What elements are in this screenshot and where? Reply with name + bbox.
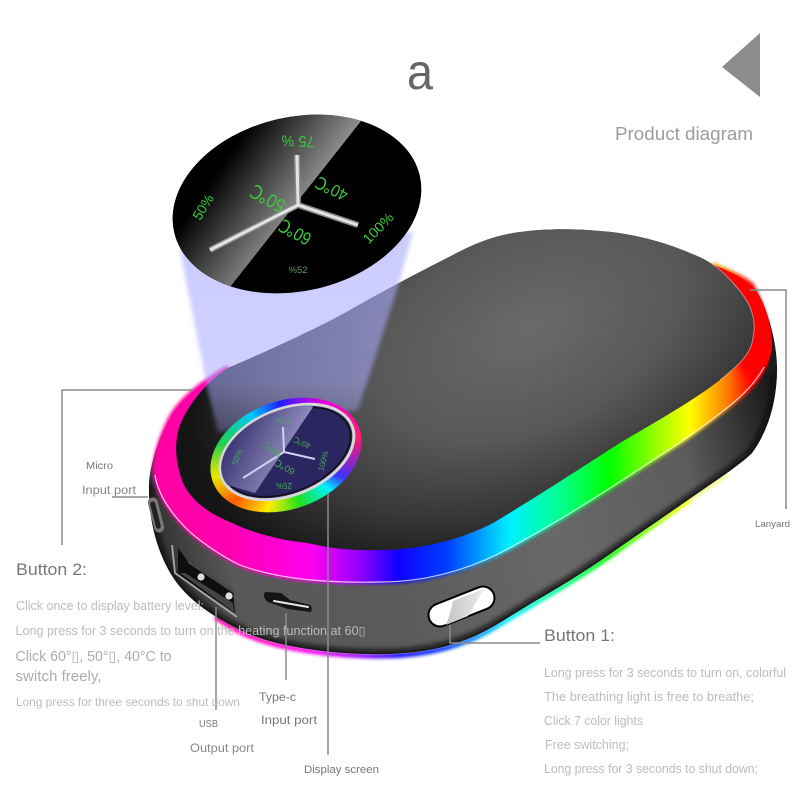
label: micro input port	[82, 461, 137, 497]
display readings: 50℃	[261, 439, 283, 459]
product: hand warmer device	[149, 229, 800, 656]
display bezel	[206, 386, 368, 518]
disc pointer spokes	[210, 155, 358, 250]
label: display screen: Display screen	[304, 764, 379, 776]
disc readings: 50%	[189, 191, 217, 223]
text block: button 1: Click 7 color lights	[544, 713, 643, 728]
enlarged display disc	[172, 114, 422, 294]
text block: button 1: Free switching;	[545, 737, 629, 752]
type-c input port	[264, 592, 312, 612]
leader: micro input port	[112, 496, 148, 498]
display sheen	[221, 405, 313, 493]
disc readings: 60℃	[275, 215, 315, 249]
underside rainbow glow	[215, 500, 690, 656]
text block: button 2	[16, 560, 366, 709]
button 1 control	[440, 589, 484, 625]
text block: button 1: Long press for 3 seconds to turn on, colorful	[544, 665, 786, 680]
label: USB output port	[190, 719, 255, 755]
heading: button 1: Button 1:	[544, 626, 615, 645]
disc sheen	[172, 114, 361, 286]
leader: display screen	[327, 493, 329, 755]
text block: button 2: Click 60°▯, 50°▯, 40°C to	[16, 649, 172, 665]
label: lanyard: Lanyard	[755, 519, 790, 530]
body edge shadow	[149, 373, 777, 654]
ring white highlight	[155, 367, 764, 582]
disc readings: 40℃	[312, 172, 351, 205]
text block: button 1	[544, 626, 786, 776]
text block: button 2: Click once to display battery level:	[16, 599, 204, 613]
rainbow ring glow	[155, 264, 768, 582]
label: USB output port: Output port	[190, 743, 255, 755]
micro USB port	[147, 496, 165, 534]
display readings: 60℃	[273, 456, 297, 477]
disc readings: %52	[288, 265, 308, 276]
red ring end	[712, 264, 772, 378]
label: type-c input port: Type-c	[259, 690, 296, 704]
display readings: 25%	[276, 481, 292, 490]
disc readings: 100%	[359, 209, 397, 247]
leader: lanyard	[750, 290, 786, 509]
display spokes	[243, 427, 315, 478]
section label: product diagram: Product diagram	[615, 123, 753, 144]
label: micro input port: Micro	[86, 461, 113, 472]
top edge highlight	[712, 264, 754, 380]
rainbow light ring	[155, 264, 772, 582]
leader lines	[62, 290, 786, 755]
icon: back arrow	[722, 33, 760, 97]
display colour ring	[200, 390, 372, 520]
leader: type-c input	[285, 613, 287, 680]
label: USB output port: USB	[199, 719, 218, 730]
USB output port	[172, 545, 237, 617]
device body	[149, 229, 777, 654]
leader: button 1	[450, 625, 540, 643]
top surface	[176, 229, 754, 550]
label: micro input port: Input port	[82, 485, 137, 497]
label: type-c input port: Input port	[261, 713, 318, 727]
display readings	[231, 416, 330, 490]
projection light beam	[180, 232, 413, 432]
label: type-c input port	[259, 690, 318, 727]
text block: button 1: Long press for 3 seconds to shut down;	[544, 761, 758, 776]
heading: button 2: Button 2:	[16, 560, 87, 579]
text block: button 2: Long press for 3 seconds to turn on the heating function at 60▯	[16, 624, 366, 638]
disc readings: 75 %	[281, 131, 315, 150]
text block: button 2: Long press for three seconds to shut down	[16, 695, 240, 709]
display readings: 50%	[231, 448, 244, 466]
disc background	[155, 91, 439, 317]
text block: button 2: switch freely,	[16, 669, 101, 685]
display readings: 40℃	[292, 435, 312, 450]
display readings: 75%	[275, 416, 291, 425]
text block: button 1: The breathing light is free to breathe;	[544, 689, 754, 704]
disc readings	[189, 131, 397, 276]
title letter: a	[407, 44, 433, 100]
small display screen	[210, 398, 362, 512]
disc readings: 50℃	[247, 179, 290, 216]
leader: USB output	[215, 607, 217, 710]
inner ring glow	[176, 368, 720, 550]
leader: button 2	[62, 390, 193, 545]
display readings: 100%	[316, 450, 330, 472]
